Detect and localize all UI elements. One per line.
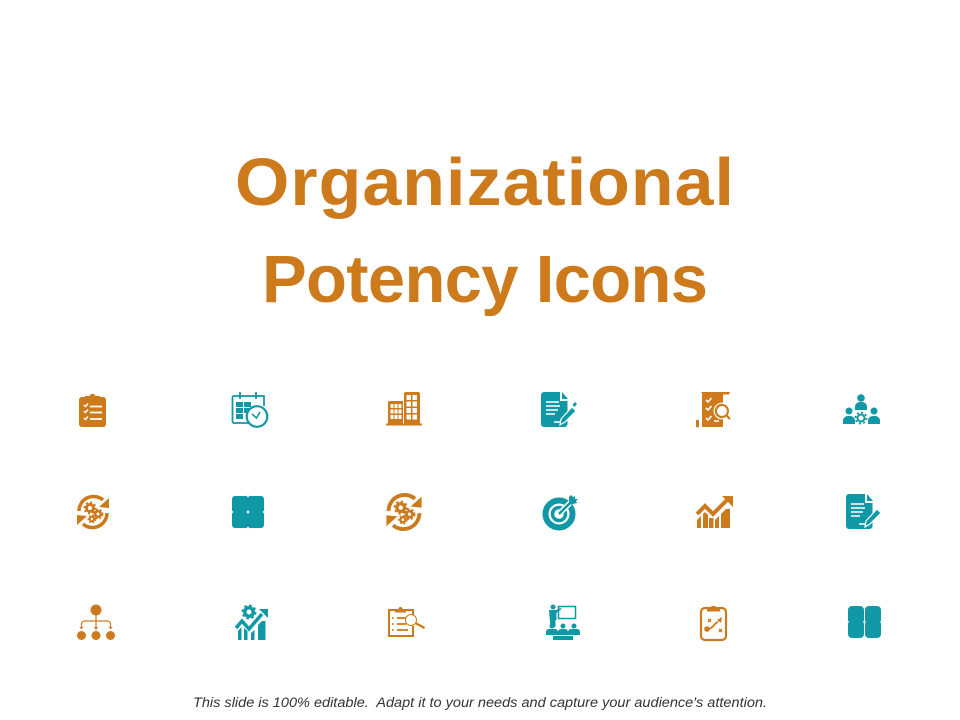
icon: document with pen (541, 392, 577, 427)
icon: team with gear (843, 394, 880, 424)
icon: gear with growth chart (236, 606, 268, 640)
title: Organizational (235, 145, 735, 220)
icon: clipboard checklist (79, 394, 106, 427)
icon: calendar with clock (232, 392, 267, 427)
icon: document with pen second (846, 494, 881, 529)
footer caption: This slide is 100% editable. Adapt it to your needs and capture your audience's attention. (193, 695, 767, 711)
icon: teal quad tiles (847, 606, 882, 638)
icon: gears cycle (77, 496, 109, 528)
title (235, 145, 735, 317)
icon: scroll checklist with magnifier (696, 392, 730, 428)
icon: gears cycle large (386, 495, 422, 529)
icon: office buildings (386, 392, 422, 425)
title: Potency Icons (262, 242, 708, 317)
icon: clipboard with magnifier (389, 607, 424, 636)
icon: org hierarchy (77, 604, 115, 640)
icon: target with arrow (546, 495, 578, 528)
icon: growth chart with arrow (697, 496, 733, 528)
icon: presenter with audience (546, 604, 580, 640)
icon: strategy clipboard (701, 606, 726, 640)
icon: teal tiles (231, 495, 265, 529)
